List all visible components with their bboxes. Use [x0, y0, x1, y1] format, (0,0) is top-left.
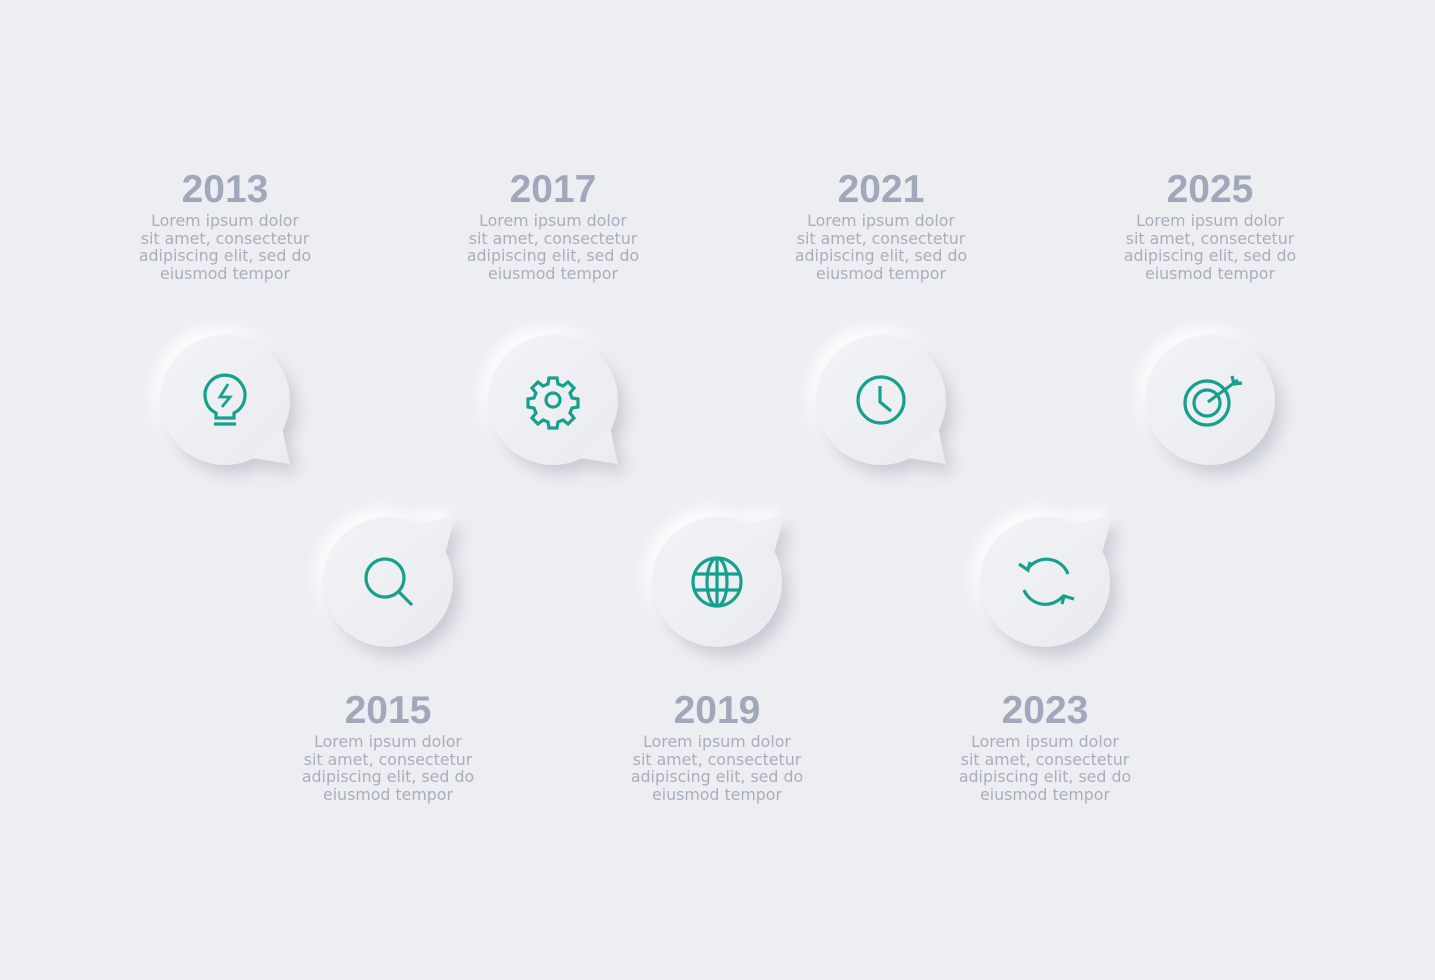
bubble: 2013: [160, 335, 290, 465]
text: 2019: [631, 689, 803, 804]
text: 2025: 2025: [1167, 168, 1253, 211]
icon: clock: [858, 377, 904, 423]
bubble: 2021: [816, 335, 946, 465]
icon: refresh: [1019, 559, 1074, 604]
icon: target: [1185, 376, 1242, 425]
text: 2021: 2021: [838, 168, 924, 211]
text: 2015: eiusmod tempor: [323, 784, 453, 804]
text: 2015: 2015: [345, 689, 431, 732]
text: 2021: sit amet, consectetur: [797, 228, 965, 248]
bubble: 2017: [488, 335, 618, 465]
text: 2023: adipiscing elit, sed do: [959, 767, 1131, 786]
icon: globe: [693, 558, 741, 606]
text: 2017: sit amet, consectetur: [469, 228, 637, 248]
text: 2025: adipiscing elit, sed do: [1124, 246, 1296, 265]
text: 2025: eiusmod tempor: [1145, 264, 1275, 282]
text: 2017: Lorem ipsum dolor: [479, 211, 627, 230]
text: 2019: sit amet, consectetur: [633, 750, 801, 768]
text: 2019: Lorem ipsum dolor: [643, 732, 791, 751]
text: 2019: adipiscing elit, sed do: [631, 767, 803, 786]
text: 2013: sit amet, consectetur: [141, 228, 309, 248]
icon: search: [366, 559, 412, 605]
text: 2017: [467, 168, 639, 282]
text: 2017: 2017: [510, 168, 596, 211]
bubble: 2025: [1145, 335, 1275, 465]
bubble: 2015: [323, 516, 455, 647]
text: 2021: [795, 168, 967, 282]
icon: gear: [528, 378, 578, 428]
bubble: 2019: [652, 516, 784, 647]
text: 2023: sit amet, consectetur: [961, 750, 1129, 768]
text: 2013: adipiscing elit, sed do: [139, 246, 311, 265]
bubble: 2023: [980, 516, 1112, 647]
text: 2015: [302, 689, 474, 804]
text: 2015: sit amet, consectetur: [304, 750, 472, 768]
icon: lightbulb: [205, 375, 245, 424]
text: 2015: adipiscing elit, sed do: [302, 767, 474, 786]
text: 2013: 2013: [182, 168, 268, 211]
text: 2017: eiusmod tempor: [488, 264, 618, 282]
text: 2013: Lorem ipsum dolor: [151, 211, 299, 230]
text: 2021: Lorem ipsum dolor: [807, 211, 955, 230]
text: 2025: sit amet, consectetur: [1126, 228, 1294, 248]
text: 2021: eiusmod tempor: [816, 264, 946, 282]
text: 2015: Lorem ipsum dolor: [314, 732, 462, 751]
text: 2019: 2019: [674, 689, 760, 732]
text: 2013: [139, 168, 311, 282]
text: 2025: [1124, 168, 1296, 282]
text: 2023: [959, 689, 1131, 804]
text: 2019: eiusmod tempor: [652, 784, 782, 804]
text: 2021: adipiscing elit, sed do: [795, 246, 967, 265]
text: 2017: adipiscing elit, sed do: [467, 246, 639, 265]
text: 2023: Lorem ipsum dolor: [971, 732, 1119, 751]
text: 2025: Lorem ipsum dolor: [1136, 211, 1284, 230]
text: 2023: eiusmod tempor: [980, 784, 1110, 804]
text: 2023: 2023: [1002, 689, 1088, 732]
text: 2013: eiusmod tempor: [160, 264, 290, 282]
